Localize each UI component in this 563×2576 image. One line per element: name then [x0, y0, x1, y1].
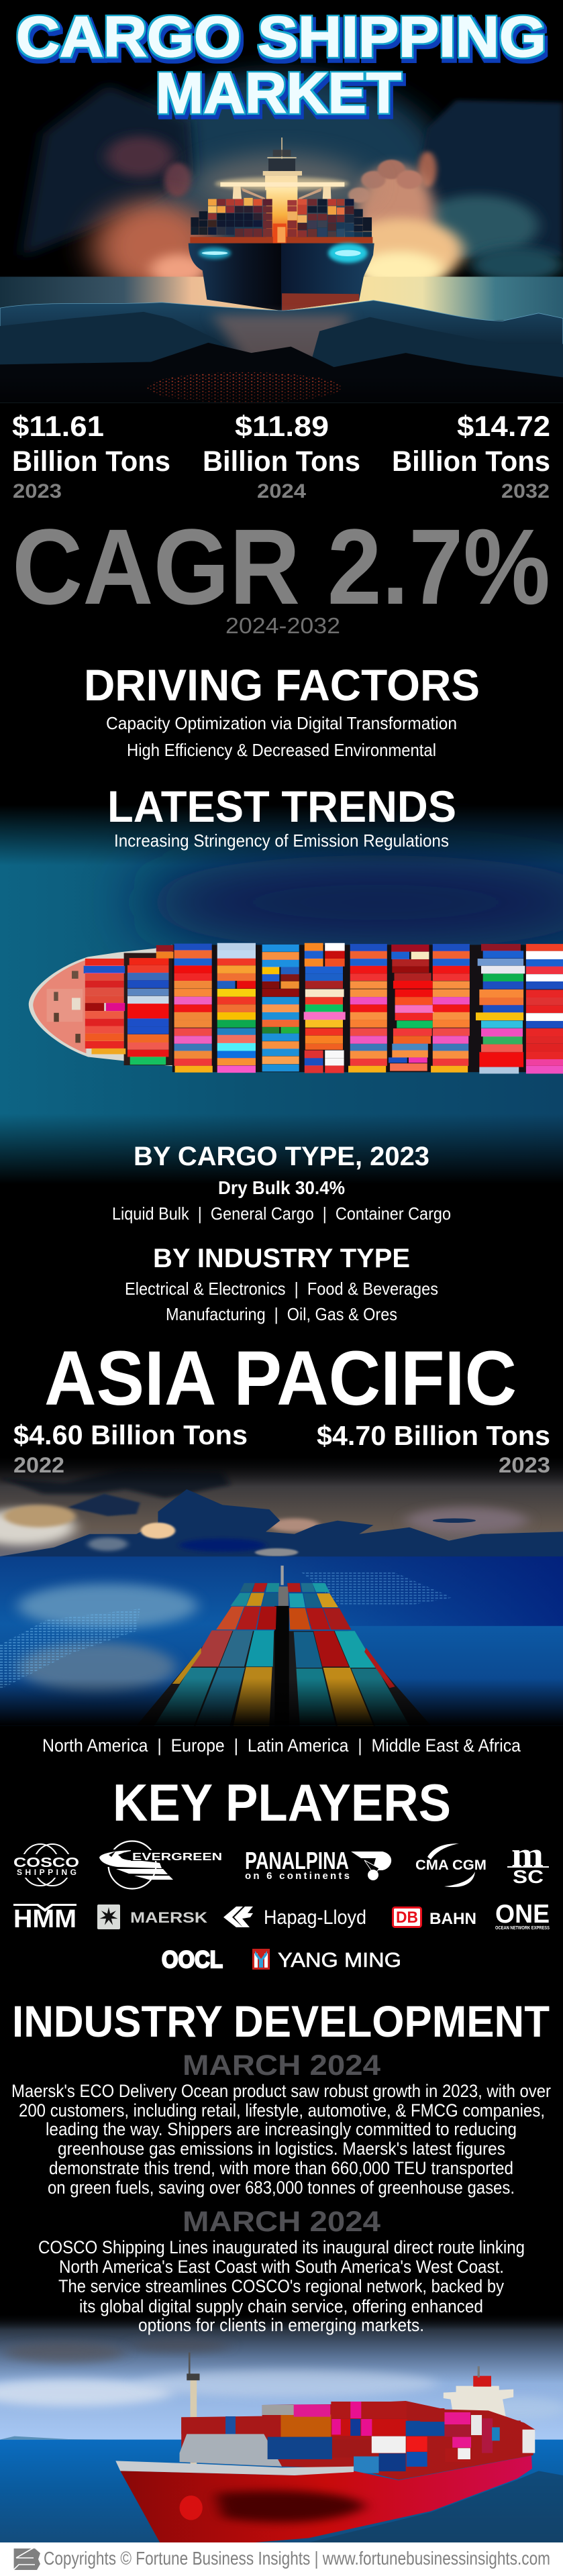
logo: MSC: m [511, 1836, 544, 1874]
ship superstructure [215, 138, 349, 237]
logo: Evergreen: EVERGREEN [132, 1851, 222, 1863]
container column 10 [476, 945, 525, 1073]
stat: 2032 market size: 2032 [501, 480, 550, 502]
container column 6 [304, 943, 346, 1073]
stat: 2032 market size [392, 411, 550, 502]
stat: Asia Pacific 2023: 2023 [499, 1453, 550, 1477]
container column 7 [348, 945, 387, 1072]
container column 3 [174, 944, 213, 1072]
logo: MSC [507, 1836, 549, 1887]
text block: Maersk development: demonstrate this trend, with more than 660,000 TEU transported [49, 2158, 513, 2178]
logo: OOCL: OOCL [162, 1947, 223, 1973]
logo: HMM: HMM [13, 1905, 76, 1933]
stat: Asia Pacific 2023 [317, 1420, 550, 1477]
text block: COSCO development [38, 2237, 525, 2335]
logo: DB Bahn: DB [396, 1909, 418, 1927]
logo: Panalpina: on 6 continents [245, 1870, 350, 1882]
fade hero into black [0, 376, 563, 423]
CAGR figure: 2024-2032 [225, 613, 340, 638]
footer: copyright bar [0, 2542, 563, 2576]
containers [180, 2401, 535, 2480]
text block: Maersk development: greenhouse gas emissions in logistics. Maersk's latest figures [58, 2139, 505, 2159]
stat: Asia Pacific 2022: $4.60 Billion Tons [13, 1419, 248, 1450]
logo: Panalpina: PANALPINA [245, 1847, 349, 1874]
title: MARKET [156, 62, 401, 125]
logo: Yang Ming: YANG MING [278, 1948, 401, 1972]
stat: 2024 market size: 2024 [257, 480, 306, 502]
ship mast [183, 2353, 201, 2464]
container column 5 [262, 945, 299, 1071]
title [16, 5, 546, 125]
logo: ONE: OCEAN NETWORK EXPRESS [495, 1926, 550, 1931]
stat: 2024 market size: Billion Tons [203, 445, 360, 478]
ship [189, 138, 374, 311]
stat: 2023 market size [12, 411, 170, 502]
logo: ONE: ONE [495, 1900, 550, 1929]
stat: 2024 market size: $11.89 [235, 411, 329, 443]
logo: COSCO Shipping [12, 1844, 81, 1886]
container column 2 [127, 945, 173, 1065]
heading: latest trends: LATEST TRENDS [107, 782, 456, 831]
logo: Evergreen [99, 1841, 225, 1889]
stat: 2032 market size: $14.72 [457, 411, 550, 443]
text block: COSCO development: The service streamlines COSCO's regional network, backed by [58, 2276, 505, 2296]
logo: Hapag-Lloyd: Hapag-Lloyd [264, 1907, 366, 1929]
container column 4 [217, 943, 256, 1073]
date: first development: MARCH 2024 [183, 2049, 380, 2082]
logo: DB Bahn [393, 1908, 476, 1928]
text: latest trend: Increasing Stringency of Emission Regulations [114, 830, 449, 851]
text: industries line 1: Electrical & Electronics | Food & Beverages [125, 1279, 438, 1299]
stat: Asia Pacific 2023: $4.70 Billion Tons [317, 1420, 550, 1451]
heading: key players: KEY PLAYERS [113, 1773, 451, 1832]
text block: COSCO development: COSCO Shipping Lines inaugurated its inaugural direct route linking [38, 2237, 525, 2257]
heading: driving factors: DRIVING FACTORS [84, 660, 480, 710]
text: driving factor 1: Capacity Optimization via Digital Transformation [106, 713, 457, 733]
panel: ocean with digital map and container ship [0, 1456, 563, 1725]
panel: cargo ship aerial image [0, 805, 563, 1190]
stat: 2023 market size: Billion Tons [12, 445, 170, 478]
text block: COSCO development: its global digital supply chain service, offering enhanced [79, 2296, 483, 2316]
logo: CMA CGM [415, 1843, 487, 1887]
text: dry bulk share: Dry Bulk 30.4% [218, 1177, 345, 1198]
heading: by industry type: BY INDUSTRY TYPE [153, 1244, 410, 1273]
glow behind ship [93, 154, 463, 292]
sea [0, 276, 563, 321]
text: other regions: North America | Europe | Latin America | Middle East & Africa [42, 1735, 521, 1756]
heading: by cargo type: BY CARGO TYPE, 2023 [134, 1142, 429, 1171]
logos: key players [12, 1836, 550, 1973]
logo: Hapag-Lloyd [223, 1907, 366, 1929]
stat: Asia Pacific 2022: 2022 [13, 1453, 64, 1477]
heading: region name: ASIA PACIFIC [44, 1336, 517, 1421]
ship hull [115, 2456, 563, 2542]
stat: 2024 market size [203, 411, 360, 502]
logo: Maersk [97, 1904, 207, 1929]
stat: 2023 market size: 2023 [13, 480, 62, 502]
clouds [0, 1469, 563, 1556]
text block: Maersk development: on green fuels, saving over 683,000 tonnes of greenhouse gases. [48, 2178, 515, 2198]
logo: COSCO Shipping: COSCO [13, 1856, 79, 1870]
containers on ship [190, 198, 372, 244]
date: second development: MARCH 2024 [183, 2206, 380, 2238]
logo: CMA CGM: CMA CGM [415, 1858, 487, 1873]
title: CARGO SHIPPING [16, 5, 546, 69]
logo: DB Bahn: BAHN [429, 1910, 476, 1928]
waves [0, 301, 563, 403]
storm clouds [21, 85, 563, 282]
ship hull [189, 244, 374, 311]
container column 8 [389, 945, 433, 1071]
text: other cargo types: Liquid Bulk | General Cargo | Container Cargo [112, 1203, 451, 1224]
hero illustration: container ship at night [0, 0, 563, 403]
ship bridge [444, 2366, 513, 2420]
logo: Maersk: MAERSK [130, 1909, 207, 1926]
logo: MSC: SC [513, 1866, 544, 1887]
text: industries line 2: Manufacturing | Oil, Gas & Ores [166, 1304, 397, 1324]
logo: COSCO Shipping: SHIPPING [17, 1868, 76, 1877]
text: driving factor 2: High Efficiency & Decreased Environmental [127, 740, 436, 760]
text block: Maersk development: leading the way. Shippers are increasingly committed to reducing [46, 2119, 517, 2139]
text block: COSCO development: options for clients in emerging markets. [138, 2315, 424, 2335]
container column 9 [431, 945, 470, 1072]
text block: Maersk development [11, 2081, 551, 2198]
containers on deck [84, 943, 563, 1073]
stat: 2023 market size: $11.61 [12, 411, 104, 443]
panel: red container ship photo [0, 2314, 563, 2542]
stat: Asia Pacific 2022 [13, 1419, 248, 1477]
text block: COSCO development: North America's East Coast with South America's West Coast. [59, 2257, 504, 2277]
container ship deck [136, 1566, 431, 1725]
stat: 2032 market size: Billion Tons [392, 445, 550, 478]
container column 11 [526, 945, 563, 1073]
ship bow [29, 945, 563, 1072]
container column 1 [84, 959, 125, 1054]
icon: Fortune Business Insights logo [13, 2548, 40, 2571]
